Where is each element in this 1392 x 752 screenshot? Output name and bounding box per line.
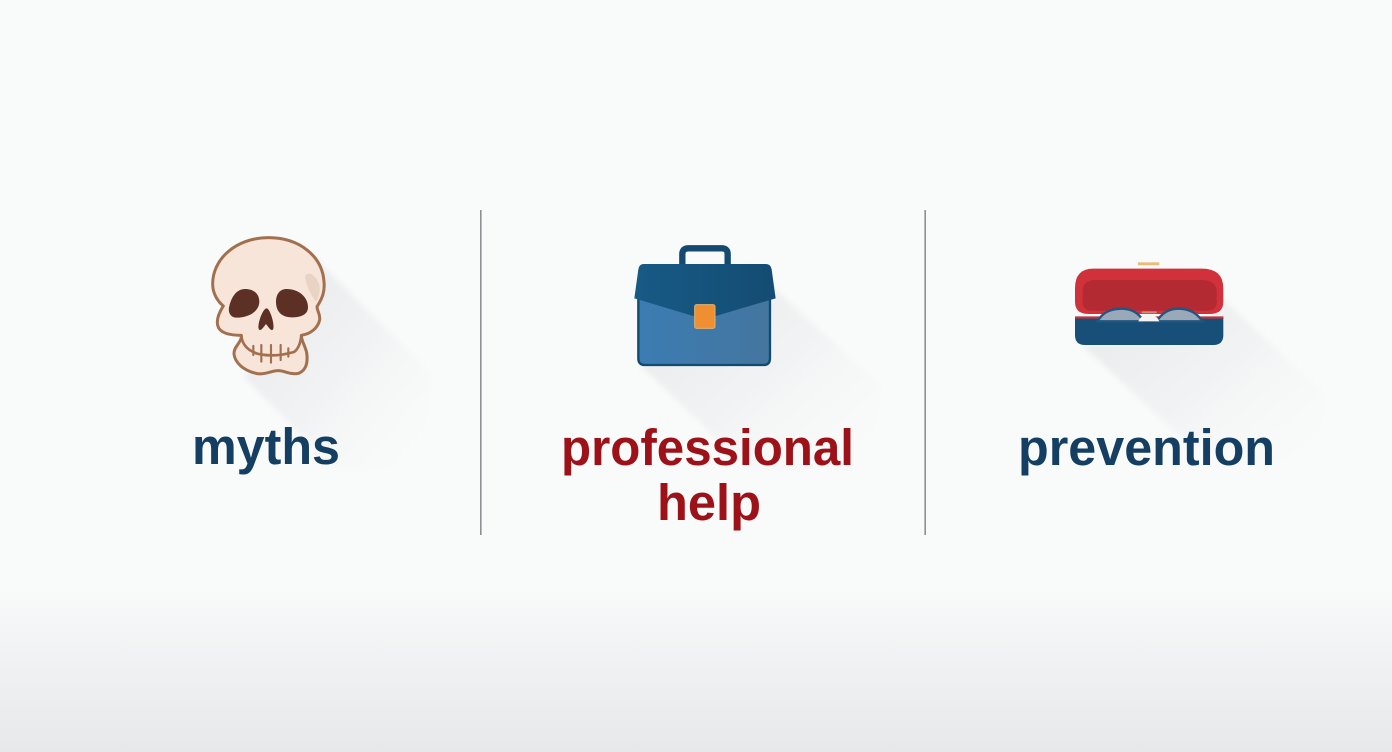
divider right bbox=[924, 210, 926, 535]
background floor gradient bbox=[0, 590, 1392, 752]
label: professional help: professional bbox=[561, 419, 854, 476]
icon: skull bbox=[213, 238, 324, 374]
icon: glasses bbox=[1098, 309, 1202, 321]
icon: clasp bbox=[695, 305, 715, 328]
label: professional help: help bbox=[657, 474, 761, 531]
icon shadow: briefcase bbox=[640, 262, 880, 470]
panel: myths bbox=[192, 238, 430, 475]
panel: prevention bbox=[1018, 262, 1325, 476]
icon: briefcase bbox=[634, 248, 776, 365]
panel: professional help bbox=[561, 248, 880, 531]
icon shadow: skull bbox=[245, 255, 430, 470]
icon: case clasp bbox=[1138, 262, 1159, 265]
divider left bbox=[480, 210, 482, 535]
label: prevention: prevention bbox=[1018, 419, 1275, 476]
icon shadow: glasses case bbox=[1082, 268, 1325, 470]
label: myths: myths bbox=[192, 418, 340, 475]
icon: glasses case bbox=[1075, 262, 1223, 345]
label: professional help bbox=[561, 419, 854, 531]
